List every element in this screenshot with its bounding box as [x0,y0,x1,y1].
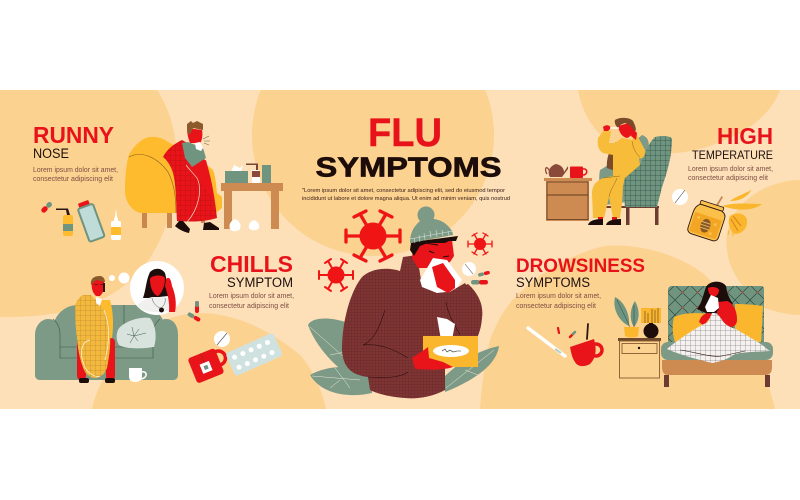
panel: high temperature [544,118,773,242]
text block: drowsiness [516,293,601,310]
heading: chills [210,251,293,290]
icon: capsule [40,201,53,214]
panel: central sick man [308,206,499,398]
armchair [125,137,222,228]
icon: large virus [346,211,400,261]
text block: chills [209,293,294,310]
sick man in red blanket [163,121,219,233]
icon: nasal spray [111,209,121,240]
icon: red tea mug [187,345,231,384]
nightstand [618,338,661,378]
icon: pill [214,331,230,347]
head with hat [410,206,458,268]
text block: high temperature: consectetur adipiscing elit [688,175,768,182]
icon: small virus right [468,233,492,255]
icon: honey jar [687,189,731,242]
title [316,111,502,182]
leaves [308,319,499,395]
sick person with blanket and phone [75,276,115,383]
title: FLU [368,111,442,155]
heading: runny nose: RUNNY [33,122,114,148]
heading: high temperature: HIGH [717,123,773,149]
heading: high temperature [692,123,773,162]
heading: chills: SYMPTOM [227,275,293,290]
text block: high temperature: Lorem ipsum dolor sit amet, [688,166,773,173]
heading: drowsiness: SYMPTOMS [516,275,590,290]
text block: high temperature [688,166,773,182]
heading: runny nose: NOSE [33,146,69,161]
icon: capsules [558,328,575,337]
lamp [641,308,661,338]
text block: drowsiness: Lorem ipsum dolor sit amet, [516,293,601,300]
intro text: "Lorem ipsum dolor sit amet, consectetur adipiscing elit, sed do eiusmod tempor [302,188,505,194]
heading: drowsiness: DROWSINESS [516,255,645,277]
intro text [302,188,510,202]
icon: pill [672,189,688,205]
icon: blister pack [225,332,283,376]
text block: chills: Lorem ipsum dolor sit amet, [209,293,294,300]
panel: drowsiness [516,255,773,387]
person with thermometer [588,118,645,225]
heading: chills: CHILLS [210,251,293,277]
text block: runny nose: consectetur adipiscing elit [33,176,113,183]
text block: runny nose: Lorem ipsum dolor sit amet, [33,167,118,174]
icon: pill and capsules [462,262,490,284]
panel: runny nose [33,121,283,242]
icon: lemon and leaves [722,189,762,236]
intro text: incididunt ut labore et dolore magna aliqua. Ut enim ad minim veniam, quis nostrud [302,196,510,202]
tissue and hand at nose [420,258,468,302]
plant [614,297,639,338]
icon: thermometer [528,328,565,356]
nightstand with teapot and mug [544,164,592,221]
heading: high temperature: TEMPERATURE [692,148,773,162]
text block: drowsiness: consectetur adipiscing elit [516,303,596,310]
icon: spray bottle [56,208,73,236]
sick woman in bed [667,282,770,363]
title: SYMPTOMS [316,152,502,182]
panel: chills [35,251,294,384]
text block: chills: consectetur adipiscing elit [209,303,289,310]
icon: capsules [187,301,201,322]
side table [221,164,283,231]
thought bubble with doctor [109,261,184,315]
icon: small virus left [319,259,353,291]
heading: runny nose [33,122,114,161]
bed [661,286,773,387]
icon: red mug with spoon [570,324,602,366]
heading: drowsiness [516,255,645,290]
text block: runny nose [33,167,118,183]
sofa [35,305,178,380]
tissue box with hand [412,317,478,370]
armchair plaid [599,135,672,225]
icon: medicine bottle [76,199,105,242]
sweater [342,255,482,398]
icon: white cup [129,368,146,382]
